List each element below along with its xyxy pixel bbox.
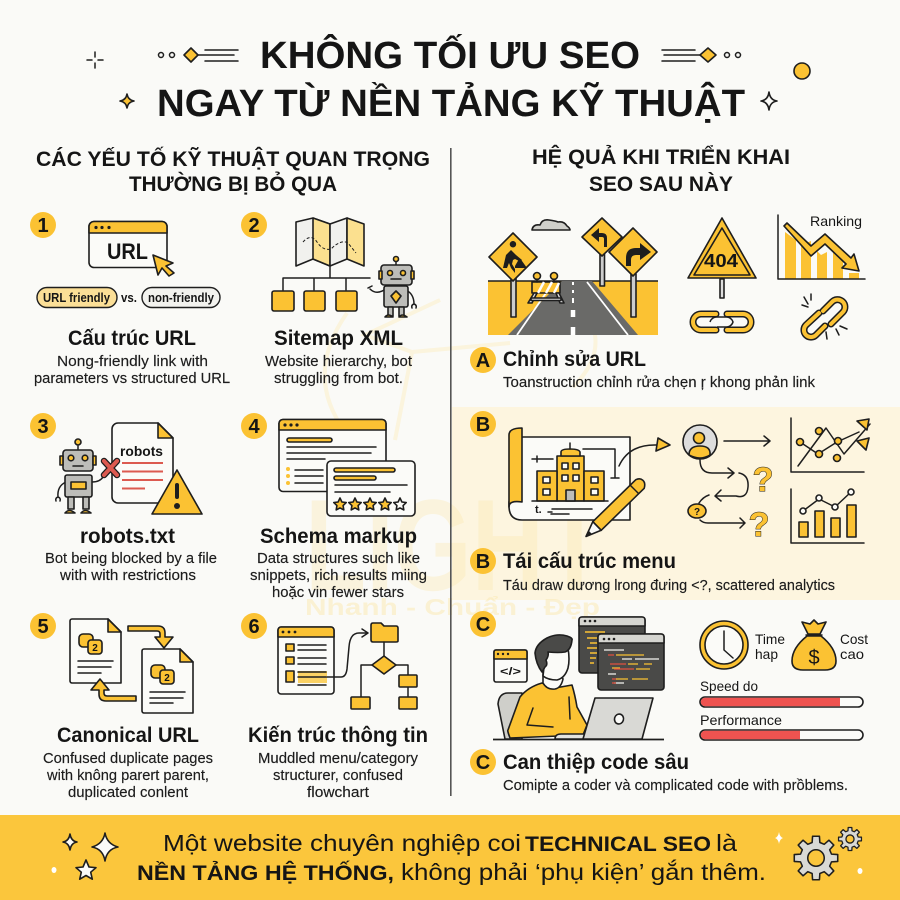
url pills [37,288,220,308]
icon: code tag window: </> [500,666,521,678]
description: flowchart [307,785,369,801]
badge 2 [241,212,267,238]
icon: 404 sign: 404 [704,251,738,271]
badge 5 [30,613,56,639]
icon: 404 sign [688,218,756,298]
title decorations [87,48,810,110]
icon: broken chain [802,294,847,339]
banner text: Một website chuyên nghiệp coi [163,830,521,856]
description: Muddled menu/category [258,751,419,767]
description: parameters vs structured URL [34,371,230,387]
icon: URL browser: URL [107,239,148,264]
banner text: không phải ‘phụ kiện’ gắn thêm. [401,859,766,885]
icon: left sparkles [52,833,118,879]
badge C top [470,611,496,637]
arrow: bottom [91,679,136,701]
heading: robots.txt: robots.txt [80,525,175,548]
watermark: pale logo [305,283,900,620]
badge 1: 1 [37,215,49,237]
icon: flowchart [351,623,417,709]
icon: back browser [279,419,386,492]
url pills: URL friendly [43,290,111,305]
icon: robots file [112,423,173,503]
left heading [36,147,430,196]
description: with with restrictions [59,568,196,584]
badge B top [470,411,496,437]
watermark: pale logo: Nhanh - Chuẩn - Đẹp [305,594,600,620]
description: Confused duplicate pages [43,751,213,767]
description: with knông parert parent, [46,768,209,784]
icon: document two: 2 [164,673,170,684]
icon: rich result card [327,461,415,516]
divider [450,148,452,796]
banner text: NỀN TẢNG HỆ THỐNG, [137,861,394,885]
title: KHÔNG TỐI ƯU SEO [260,32,640,77]
icon: code window front [598,634,664,690]
badge B top: B [476,414,490,436]
description: structurer, confused [273,768,403,784]
description: hoặc vin fewer stars [272,585,404,601]
text: cost: cao [840,646,864,662]
description: Data structures such like [257,551,420,567]
icon: menu browser [278,627,334,694]
banner text: là [716,830,737,856]
icon: document two [142,649,193,713]
panel: C deep code [470,611,868,794]
icon: user flow arrows: ? [694,507,700,518]
icon: user flow arrows [688,436,773,544]
description: Táu draw dương lrong đưing <?, scattered analytics [503,578,835,594]
badge 5: 5 [37,616,49,638]
text: time [755,631,785,662]
description: Toanstruction chỉnh rửa chẹn ŗ khong phản link [503,375,816,391]
icon: robot [368,256,416,317]
panel: 6 info architecture [241,613,428,801]
progress: speed: Speed do [700,678,758,694]
description [34,354,230,387]
panel: 2 Sitemap [241,212,416,387]
icon: user flow arrows: ? [749,506,769,544]
text: cost [840,631,868,662]
icon: money bag: $ [808,647,820,669]
right heading: SEO SAU NÀY [589,173,733,196]
description: Bot being blocked by a file [45,551,217,567]
icon: user flow arrows: ? [753,461,773,499]
icon: clock [700,621,748,669]
badge A: A [476,350,490,372]
url pills: non-friendly [148,290,215,305]
badge 6 [241,613,267,639]
progress: speed [700,678,863,707]
icon: map and tree [272,218,370,311]
badge 6: 6 [248,616,260,638]
description: struggling from bot. [274,371,403,387]
banner text: TECHNICAL SEO [525,833,711,856]
description [45,551,217,584]
icon: robots file: robots [120,443,163,459]
heading: Chỉnh sửa URL: Chỉnh sửa URL [503,348,646,371]
footer banner [0,815,900,900]
heading: Sitemap XML: Sitemap XML [274,327,403,350]
icon: warning [152,470,202,514]
arrow: blueprint to person [619,438,670,466]
badge C [470,749,496,775]
icon: code tag window [494,650,527,682]
icon: document one [70,619,121,683]
icon: code window back [579,617,645,673]
icon: person [683,425,717,459]
heading: Cấu trúc URL: Cấu trúc URL [68,327,196,350]
description [43,751,213,801]
banner text [137,830,766,885]
badge 1 [30,212,56,238]
description: Comipte a coder và complicated code with prồblems. [503,778,848,794]
description: Nong-friendly link with [57,354,208,370]
icon: developer [508,635,587,739]
icon: money bag [792,620,836,670]
heading: Tái cấu trúc menu: Tái cấu trúc menu [503,550,676,573]
chart: bar and line chart [791,489,864,543]
badge C: C [476,752,490,774]
chart: line chart [791,418,870,472]
description: duplicated conlent [68,785,188,801]
icon: chain [693,314,751,330]
badge 2: 2 [248,215,260,237]
description [258,751,419,801]
title: NGAY TỪ NỀN TẢNG KỸ THUẬT [157,81,745,125]
badge B [470,548,496,574]
description: snippets, rich results miing [250,568,427,584]
badge 4: 4 [248,416,260,438]
title [157,32,745,125]
heading: Can thiệp code sâu: Can thiệp code sâu [503,751,689,774]
left heading: CÁC YẾU TỐ KỸ THUẬT QUAN TRỌNG [36,147,430,171]
icon: road barrier [528,272,564,303]
badge A [470,347,496,373]
icon: robot [56,439,103,513]
badge 3 [30,413,56,439]
heading: Kiến trúc thông tin: Kiến trúc thông tin [248,724,428,747]
icon: blueprint [509,428,630,520]
arrow: top [128,626,173,648]
badge 4 [241,413,267,439]
description [250,551,427,601]
icon: ranking chart [778,213,865,279]
icon: ranking chart: Ranking [810,213,862,229]
panel: 1 URL structure [30,212,230,387]
badge 3: 3 [37,416,49,438]
left heading: THƯỜNG BỊ BỎ QUA [129,172,337,196]
icon: URL browser [89,221,174,276]
icon: blueprint: t. [535,504,542,516]
icon: gears [775,828,862,880]
text: time: hap [755,646,778,662]
right heading [532,145,790,196]
panel: 5 canonical [30,613,213,801]
watermark: pale logo: LIGHT [305,472,605,618]
icon: pencil [586,479,645,536]
panel: 3 robots.txt [30,413,217,584]
icon: document one: 2 [92,643,98,654]
badge C top: C [476,614,490,636]
text: time: Time [755,631,785,647]
panel: 4 schema [241,413,427,601]
progress: performance [700,712,863,740]
heading: Schema markup: Schema markup [260,525,417,548]
icon: red cross [104,461,117,475]
text: cost: Cost [840,631,868,647]
description [265,354,412,387]
heading: Canonical URL: Canonical URL [57,724,199,747]
badge B: B [476,551,490,573]
description: Website hierarchy, bot [265,354,412,370]
icon: road scene [488,218,658,335]
url pills: vs. [121,290,137,305]
icon: laptop [493,698,664,740]
right heading: HỆ QUẢ KHI TRIỂN KHAI [532,145,790,169]
icon: chair [498,693,522,739]
arrow: to folder [327,629,368,677]
panel: B menu restructure [470,411,870,594]
panel: A URL changes [470,213,865,391]
progress: performance: Performance [700,712,782,728]
